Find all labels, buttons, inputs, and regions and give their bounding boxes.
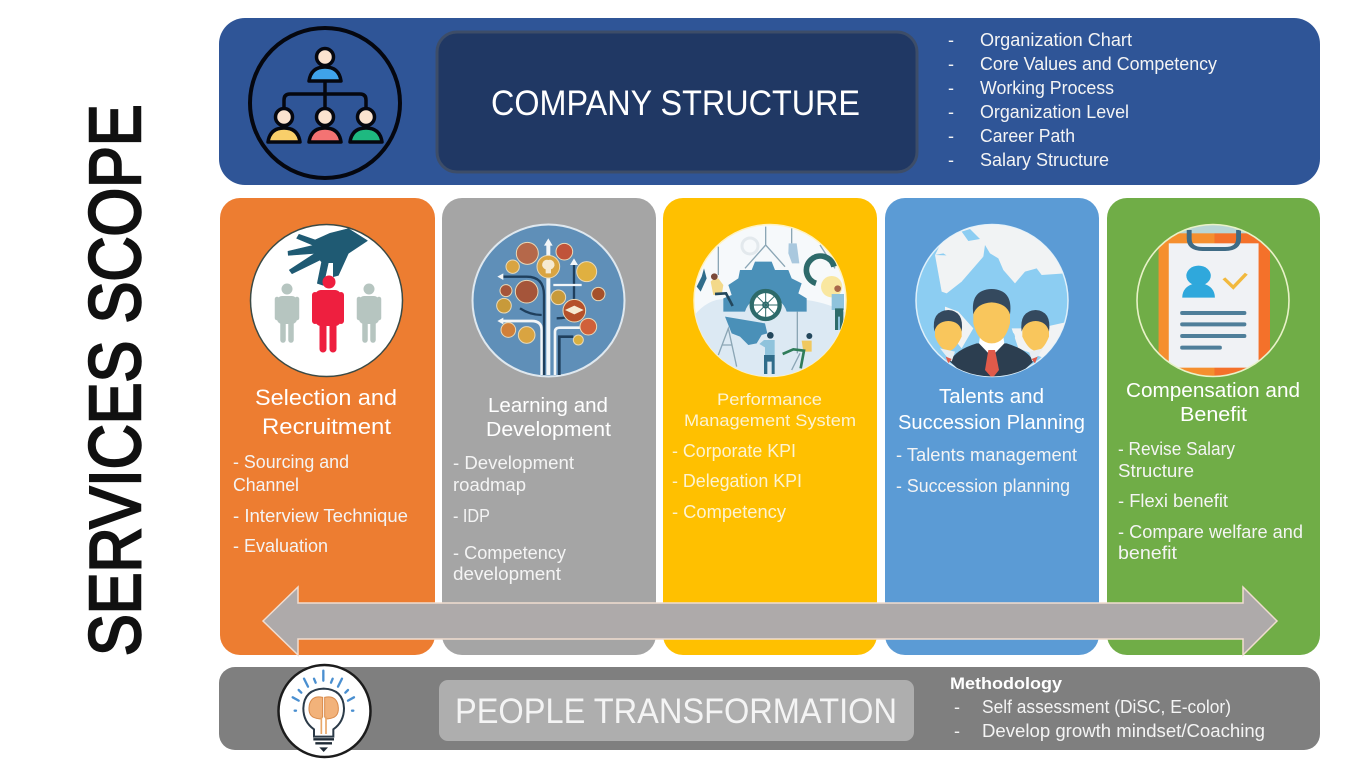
heading: people transformation	[439, 680, 914, 741]
heading: selection and recruitment: Selection and	[255, 385, 397, 410]
text block: company structure list: Organization Chart	[980, 30, 1132, 50]
icon: gears and workers	[693, 224, 847, 380]
text block: methodology: -	[954, 697, 960, 717]
text block: learning items: roadmap	[453, 475, 526, 495]
heading: performance management system: Performance	[717, 390, 822, 409]
text block: performance items: - Delegation KPI	[672, 471, 802, 491]
panel: selection and recruitment	[220, 198, 435, 655]
text block: learning items	[453, 453, 574, 584]
heading: people transformation: PEOPLE TRANSFORMATION	[455, 692, 897, 731]
heading: performance management system: Management System	[684, 411, 856, 430]
text block: compensation items: - Flexi benefit	[1118, 491, 1228, 511]
heading: talents and succession planning: Succession Planning	[898, 412, 1085, 434]
text block: learning items: - IDP	[453, 506, 490, 526]
text block: compensation items: - Revise Salary	[1118, 439, 1235, 459]
text block: company structure list: Working Process	[980, 78, 1114, 98]
text block: talents items: - Succession planning	[896, 476, 1070, 496]
text block: selection items	[233, 452, 408, 556]
icon: learning tree	[472, 224, 624, 376]
panel: company structure	[219, 18, 1320, 185]
text block: performance items: - Corporate KPI	[672, 441, 796, 461]
heading: selection and recruitment	[255, 385, 397, 439]
icon: organization chart	[250, 28, 400, 178]
heading: company structure	[437, 32, 917, 172]
arrow: double-headed span across panels	[263, 587, 1277, 655]
heading: talents and succession planning: Talents and	[939, 386, 1044, 408]
text block: performance items: - Competency	[672, 502, 786, 522]
panel: talents and succession planning	[885, 198, 1099, 655]
text block: learning items: - Competency	[453, 543, 566, 563]
text block: company structure list: -	[948, 150, 954, 170]
panel: learning and development	[442, 198, 656, 655]
text block: selection items: - Sourcing and	[233, 452, 349, 472]
text block: company structure list: -	[948, 54, 954, 74]
icon: light bulb with brain	[278, 665, 370, 757]
text block: methodology: Self assessment (DiSC, E-color)	[982, 697, 1231, 717]
heading: compensation and benefit	[1126, 380, 1300, 426]
panel: compensation and benefit	[1107, 198, 1320, 655]
text block: compensation items: benefit	[1118, 543, 1177, 563]
heading: performance management system	[684, 390, 856, 430]
text block: company structure list: -	[948, 30, 954, 50]
panel: performance management system	[663, 198, 877, 655]
text block: methodology: Methodology	[950, 674, 1063, 693]
heading: compensation and benefit: Compensation and	[1126, 380, 1300, 402]
text block: compensation items: Structure	[1118, 461, 1194, 481]
text block: company structure list: Organization Level	[980, 102, 1129, 122]
icon: business team on a globe	[916, 218, 1068, 378]
heading: selection and recruitment: Recruitment	[262, 414, 391, 439]
text block: performance items	[672, 441, 802, 522]
text block: learning items: - Development	[453, 453, 574, 473]
text block: company structure list	[948, 30, 1217, 170]
text block: company structure list: Core Values and Competency	[980, 54, 1217, 74]
text block: selection items: - Interview Technique	[233, 506, 408, 526]
text block: talents items	[896, 445, 1077, 496]
text block: company structure list: -	[948, 78, 954, 98]
text block: company structure list: -	[948, 102, 954, 122]
text block: methodology: Develop growth mindset/Coaching	[982, 721, 1265, 741]
text block: methodology	[950, 674, 1265, 741]
heading: learning and development	[486, 395, 611, 441]
heading: compensation and benefit: Benefit	[1180, 404, 1247, 426]
heading: company structure: COMPANY STRUCTURE	[491, 84, 860, 123]
text block: compensation items	[1118, 439, 1303, 563]
text block: methodology: -	[954, 721, 960, 741]
text block: company structure list: Career Path	[980, 126, 1075, 146]
text block: learning items: development	[453, 564, 561, 584]
heading: learning and development: Development	[486, 419, 611, 441]
panel: people transformation	[219, 665, 1320, 757]
heading: talents and succession planning	[898, 386, 1085, 434]
text block: company structure list: -	[948, 126, 954, 146]
text block: selection items: Channel	[233, 475, 299, 495]
text block: talents items: - Talents management	[896, 445, 1077, 465]
title: services scope: SERVICES SCOPE	[76, 104, 156, 656]
icon: clipboard with profile	[1135, 222, 1290, 377]
text block: compensation items: - Compare welfare and	[1118, 522, 1303, 542]
text block: company structure list: Salary Structure	[980, 150, 1109, 170]
heading: learning and development: Learning and	[488, 395, 608, 417]
icon: hand picking a person	[250, 224, 402, 376]
text block: selection items: - Evaluation	[233, 536, 328, 556]
